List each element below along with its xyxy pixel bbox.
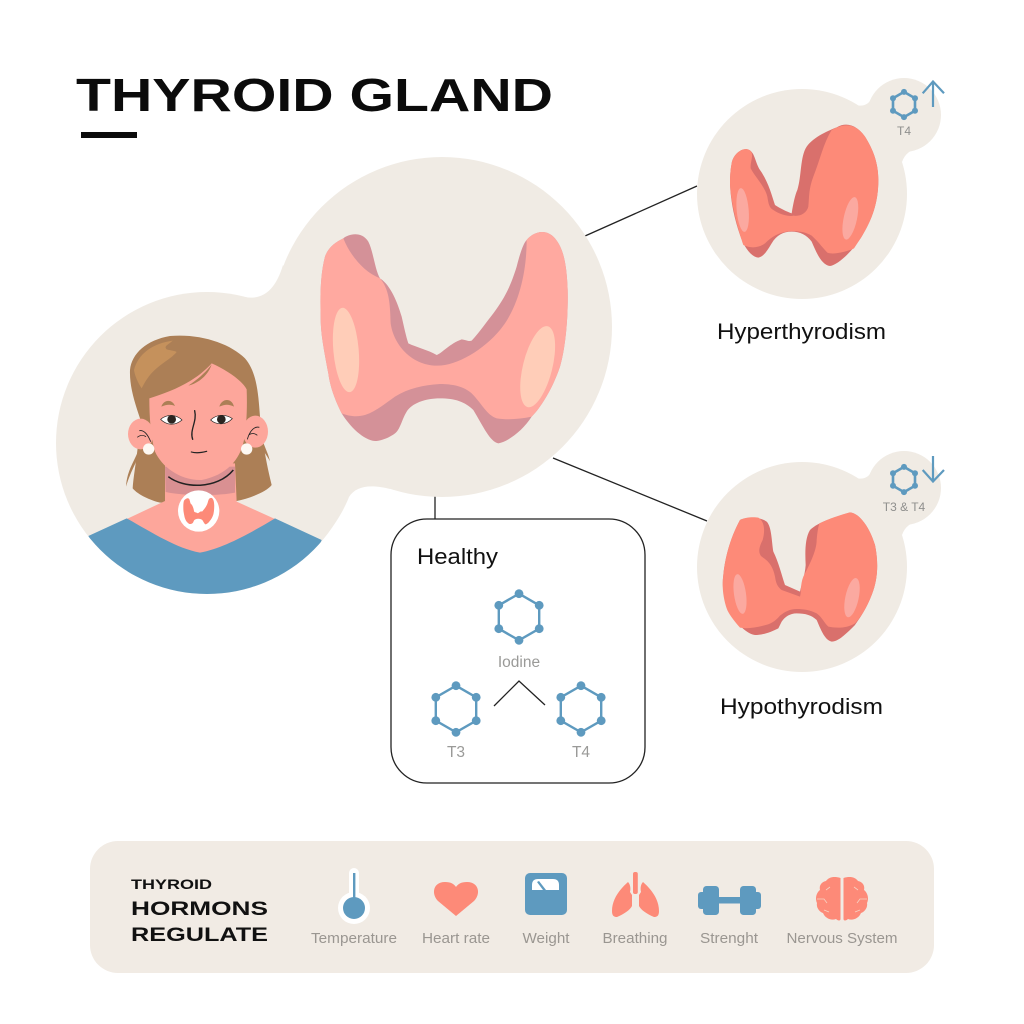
- heading: thyroid hormons regulate: THYROID: [131, 876, 212, 892]
- label: Temperature: Temperature: [311, 931, 397, 947]
- label: Weight: Weight: [522, 931, 570, 947]
- heading: Hypothyrodism: Hypothyrodism: [720, 694, 883, 719]
- label: T3 and T4: T3 & T4: [883, 500, 926, 514]
- icon: thermometer: [338, 868, 370, 924]
- label: T3: T3: [447, 744, 465, 761]
- icon: weight scale: [525, 873, 567, 915]
- title: THYROID GLAND: [76, 69, 553, 121]
- heading: Healthy: Healthy: [417, 544, 498, 569]
- illustration: hypothyroid gland: [723, 512, 877, 642]
- illustration: hyperthyroid gland: [730, 125, 878, 266]
- label: T4: T4: [572, 744, 590, 761]
- icon: arrow up: [923, 82, 944, 107]
- icon: T4 molecule: [556, 681, 606, 737]
- connector line: hypothyroidism: [553, 458, 707, 521]
- label: Nervous System: Nervous System: [786, 931, 898, 947]
- panel: hypothyroidism background: [697, 451, 941, 672]
- label: Strenght: Strenght: [700, 931, 758, 947]
- icon: iodine molecule: [494, 589, 544, 645]
- chevron connector: [494, 681, 545, 706]
- connector line: healthy: [434, 447, 436, 519]
- heading: thyroid hormons regulate: [131, 876, 268, 946]
- icon: T3 molecule: [431, 681, 481, 737]
- title underline: [81, 132, 137, 138]
- label: Breathing: Breathing: [602, 931, 668, 947]
- panel: healthy box: [391, 519, 645, 783]
- icon: heart: [434, 882, 478, 916]
- panel: hyperthyroidism background: [697, 78, 941, 299]
- panel: patient and healthy gland background: [56, 157, 612, 594]
- icon: arrow down: [923, 456, 944, 482]
- heading: Hyperthyrodism: Hyperthyrodism: [717, 319, 886, 344]
- icon: T3 and T4 molecule: [890, 464, 918, 495]
- label: T4: T4: [897, 124, 911, 138]
- icon: dumbbell: [698, 886, 761, 915]
- label: Heart rate: Heart rate: [422, 931, 490, 947]
- illustration: healthy thyroid gland: [320, 232, 568, 443]
- heading: thyroid hormons regulate: REGULATE: [131, 924, 268, 946]
- illustration: woman portrait: [88, 336, 322, 620]
- heading: thyroid hormons regulate: HORMONS: [131, 898, 268, 920]
- panel: thyroid hormones regulate: [90, 841, 934, 973]
- connector line: hyperthyroidism: [585, 186, 697, 236]
- icon: T4 molecule: [890, 89, 918, 120]
- icon: brain: [816, 877, 868, 920]
- label: Iodine: Iodine: [498, 654, 540, 671]
- icon: lungs: [612, 872, 659, 917]
